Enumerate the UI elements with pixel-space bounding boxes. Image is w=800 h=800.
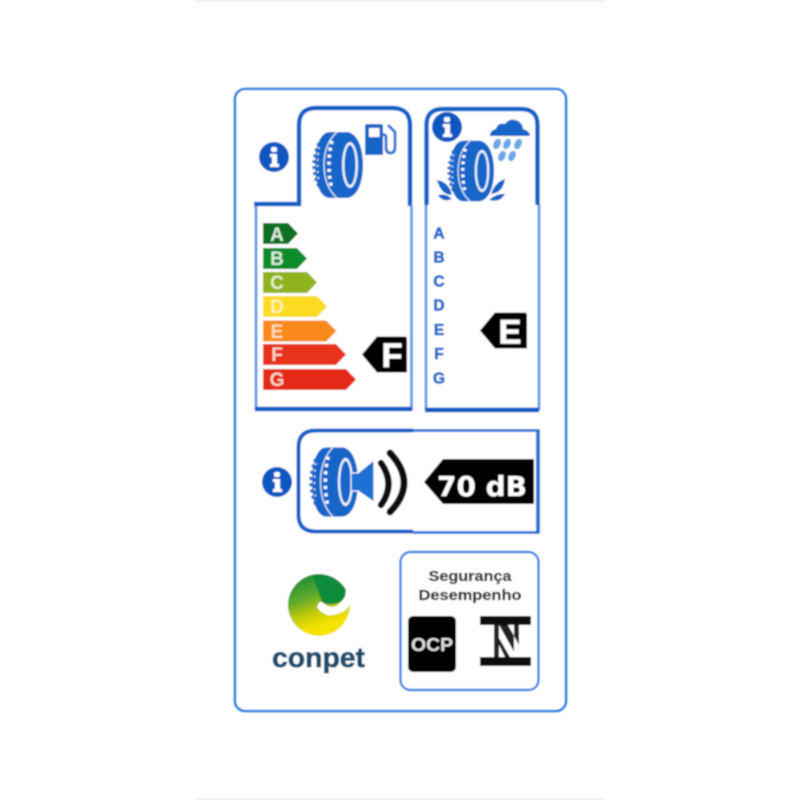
- wet grip letter scale: E: [434, 322, 444, 339]
- rating bar B: [263, 248, 307, 270]
- rating bar E: [263, 320, 336, 343]
- icon: tire fuel: [314, 132, 363, 198]
- icon: water splash left: [437, 180, 452, 200]
- rating arrow E: [480, 312, 527, 352]
- rating bar D: [263, 296, 327, 318]
- panel: certification: [400, 552, 538, 690]
- rating bar G: [263, 369, 356, 391]
- panel: noise: [262, 430, 538, 533]
- panel: wet grip: [425, 109, 539, 410]
- panel: fuel efficiency: [254, 108, 412, 409]
- rating bar D: D: [270, 297, 284, 318]
- rating arrow F: [362, 336, 407, 375]
- certification heading: Segurança: [428, 568, 512, 585]
- rating arrow E: E: [499, 314, 521, 352]
- icon: tire wet: [449, 141, 494, 201]
- icon: info wet: [432, 112, 462, 142]
- logo: conpet: conpet: [272, 642, 365, 673]
- certification heading: [418, 568, 522, 604]
- icon: water splash right: [489, 179, 505, 201]
- noise arrow: 70 dB: [437, 470, 527, 503]
- OCP badge: OCP: [411, 635, 453, 655]
- icon: fuel pump: [365, 124, 395, 155]
- wet grip letter scale: F: [434, 346, 444, 363]
- icon: sound waves: [381, 453, 404, 512]
- rating bar F: F: [271, 345, 283, 366]
- rating bar C: [263, 272, 317, 294]
- Inmetro mark: [480, 616, 531, 666]
- outer label frame: [235, 89, 566, 711]
- certification heading: Desempenho: [418, 587, 522, 604]
- wet grip letter scale: B: [433, 250, 445, 266]
- rating bar A: [263, 223, 298, 246]
- wet grip letter scale: G: [433, 370, 445, 388]
- icon: tire noise: [311, 447, 358, 517]
- page background bands: [195, 0, 605, 800]
- icon: info noise: [262, 467, 292, 497]
- icon: rain cloud: [490, 120, 530, 162]
- rating arrow F: F: [382, 337, 402, 375]
- wet grip letter scale: C: [433, 274, 445, 290]
- wet grip letter scale: D: [433, 298, 445, 314]
- wet grip letter scale: A: [433, 226, 445, 242]
- rating bar G: G: [270, 370, 284, 391]
- rating bar E: E: [271, 322, 283, 343]
- rating bar B: B: [270, 249, 284, 270]
- wet grip letter scale: [433, 226, 445, 388]
- icon: info fuel: [259, 142, 289, 172]
- icon: speaker: [351, 460, 374, 502]
- logo: conpet: [272, 574, 365, 673]
- noise arrow: [424, 459, 534, 504]
- rating bar A: A: [270, 225, 284, 246]
- rating bar F: [263, 344, 346, 366]
- rating bar C: C: [270, 273, 284, 294]
